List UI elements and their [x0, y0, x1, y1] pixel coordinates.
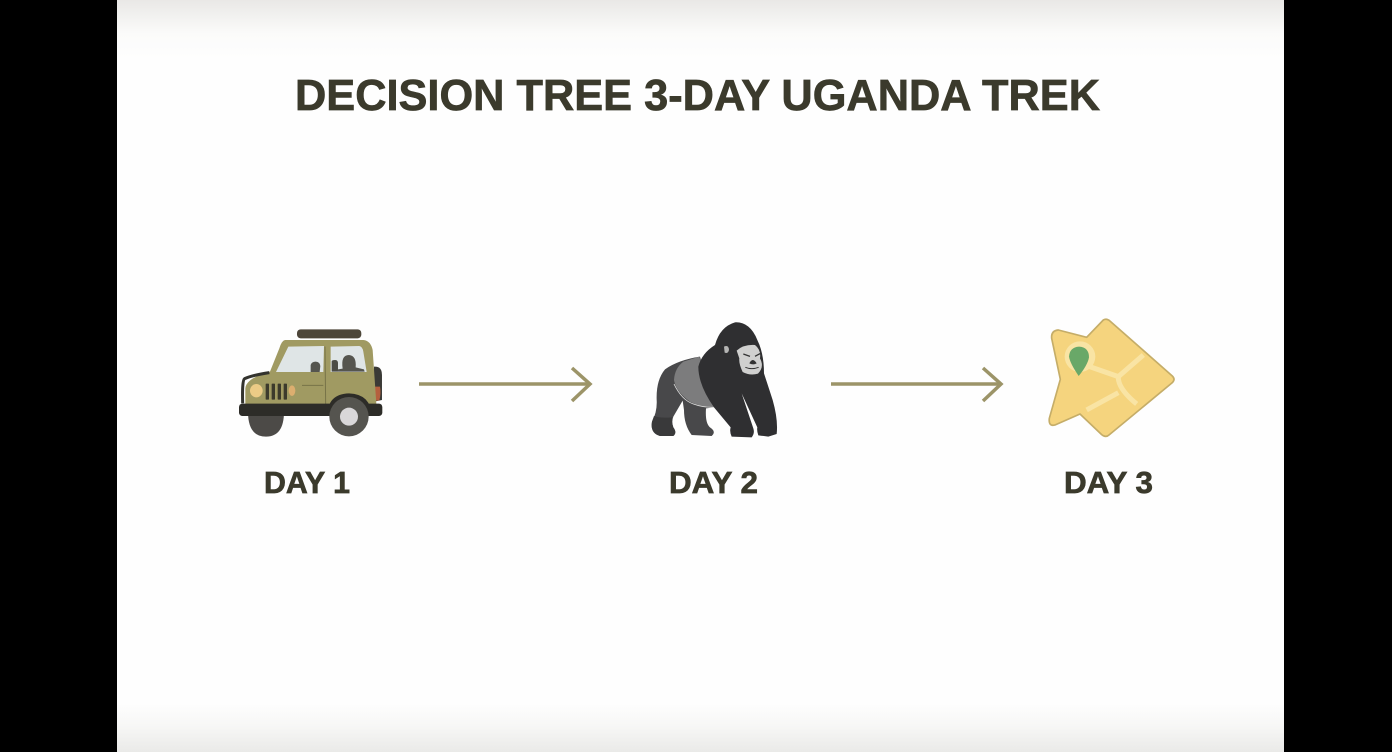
arrow: day 2 to day 3 [831, 368, 1001, 401]
arrow: day 1 to day 2 [419, 368, 590, 401]
title: DECISION TREE 3-DAY UGANDA TREK [295, 71, 1100, 120]
map roads [1085, 355, 1143, 410]
icon: gorilla [652, 322, 777, 437]
label: day 2: DAY 2 [669, 465, 758, 500]
label: day 1: DAY 1 [264, 465, 350, 500]
label: day 3: DAY 3 [1064, 465, 1153, 500]
icon: safari jeep [239, 329, 382, 437]
icon: map with location pin [1049, 319, 1174, 436]
